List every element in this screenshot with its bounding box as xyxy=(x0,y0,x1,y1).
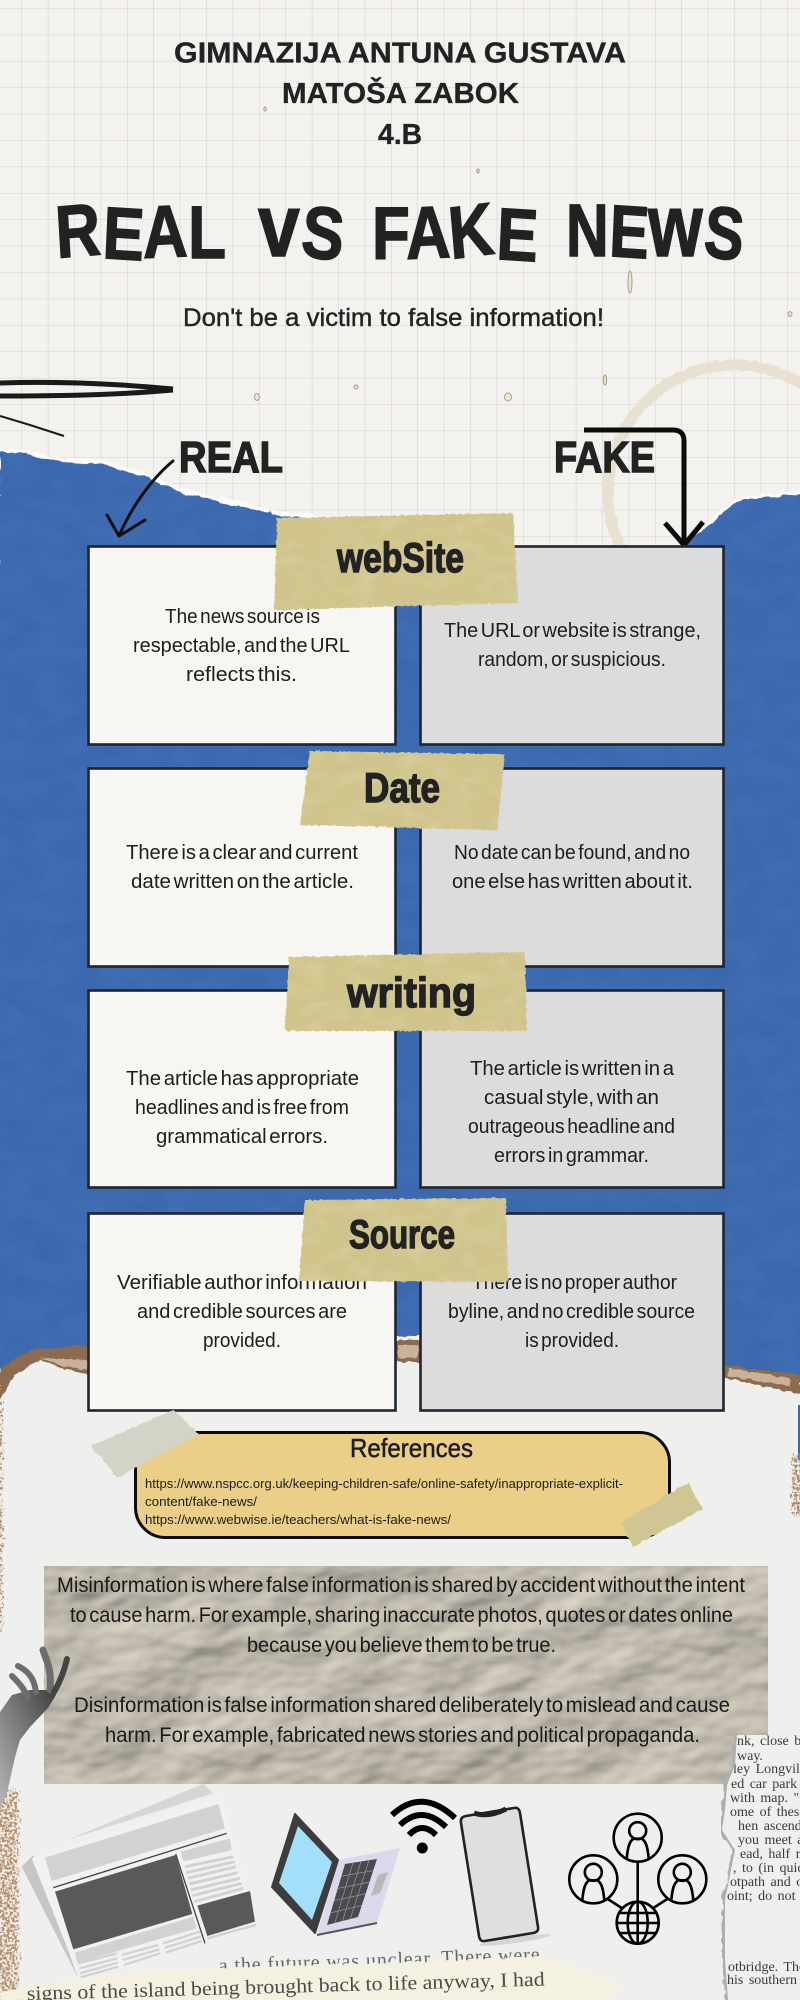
text: date fake: one else has written about it. xyxy=(452,870,693,893)
school name heading xyxy=(174,38,626,151)
text: writing fake xyxy=(468,1057,675,1167)
title: real vs fake news xyxy=(52,176,749,277)
text: writing fake: casual style, with an xyxy=(484,1086,659,1109)
reference links: https://www.nspcc.org.uk/keeping-children-safe/online-safety/inappropriate-explicit- xyxy=(145,1477,623,1491)
disinformation text: harm. For example, fabricated news stories and political propaganda. xyxy=(105,1724,700,1747)
panel: real vs fake cards xyxy=(88,546,724,1410)
arrow: real xyxy=(107,461,173,536)
text: source fake: There is no proper author xyxy=(472,1271,677,1294)
misinformation text: to cause harm. For example, sharing inaccurate photos, quotes or dates online xyxy=(70,1604,733,1627)
text: date real: There is a clear and current xyxy=(126,841,358,864)
text: source real: and credible sources are xyxy=(137,1300,347,1323)
hand reaching up xyxy=(0,1650,67,1810)
text: writing fake: The article is written in a xyxy=(470,1057,675,1080)
reference links xyxy=(145,1477,623,1527)
tape: source xyxy=(299,1198,508,1282)
text: source real: provided. xyxy=(203,1329,281,1352)
torn newspaper clipping right xyxy=(722,1734,800,2000)
icon: smartphone xyxy=(461,1808,551,1948)
tape: writing xyxy=(285,952,527,1031)
text: website real xyxy=(133,605,350,686)
text: source real: Verifiable author information xyxy=(117,1271,367,1294)
text: writing fake: errors in grammar. xyxy=(494,1144,649,1167)
newspaper clipping bottom xyxy=(0,1944,623,2000)
text: writing real xyxy=(126,1067,359,1148)
coffee ring stain xyxy=(608,365,800,619)
reference links: https://www.webwise.ie/teachers/what-is-fake-news/ xyxy=(145,1513,452,1527)
white fringe of the torn blue paper xyxy=(0,448,800,560)
label: fake: FAKE xyxy=(554,433,655,482)
text: writing real: grammatical errors. xyxy=(156,1125,328,1148)
misinformation text: because you believe them to be true. xyxy=(247,1634,556,1657)
icon: wifi xyxy=(392,1802,455,1854)
misinformation text: Misinformation is where false information is shared by accident without the intent xyxy=(57,1574,745,1597)
title: real vs fake news: NEwS xyxy=(566,176,749,276)
school name heading: 4.B xyxy=(378,119,422,151)
text: source fake: is provided. xyxy=(525,1329,619,1352)
school name heading: MATOŠA ZABOK xyxy=(282,76,519,110)
text: website real: The news source is xyxy=(165,605,320,628)
blue torn paper background xyxy=(0,452,800,1377)
panel: references xyxy=(136,1432,670,1538)
text: website fake xyxy=(444,619,701,671)
disinformation text xyxy=(74,1694,730,1747)
title: real vs fake news: vS xyxy=(258,176,349,276)
text: date fake xyxy=(452,841,693,893)
text: date real xyxy=(126,841,358,893)
tape: writing: writing xyxy=(346,969,476,1016)
tape: yellow on references xyxy=(621,1483,703,1547)
text: source fake xyxy=(448,1271,695,1352)
text: source fake: byline, and no credible source xyxy=(448,1300,695,1323)
tape: date: Date xyxy=(364,764,440,811)
reference links: content/fake-news/ xyxy=(145,1495,258,1509)
text: writing real: The article has appropriate xyxy=(126,1067,359,1090)
panel: crumpled paper definitions xyxy=(44,1566,768,1784)
text: website real: respectable, and the URL xyxy=(133,634,350,657)
icon: people network with globe xyxy=(569,1814,706,1944)
tape: website: webSite xyxy=(336,534,464,581)
torn newspaper clipping right: way. xyxy=(737,1749,763,1764)
tape: grey on references xyxy=(91,1410,199,1478)
icon: laptop xyxy=(272,1814,400,1935)
title: real vs fake news: FAKE xyxy=(372,188,540,277)
text: writing fake: outrageous headline and xyxy=(468,1115,675,1138)
tape: source: Source xyxy=(349,1213,455,1257)
brown torn band xyxy=(0,1340,800,1400)
arrow: fake xyxy=(584,430,703,545)
title: real vs fake news: REAL xyxy=(52,188,226,276)
text: source real xyxy=(117,1271,367,1352)
misinformation text xyxy=(57,1574,745,1657)
text: website fake: random, or suspicious. xyxy=(478,648,666,671)
tape: date xyxy=(300,751,505,830)
scribble lines xyxy=(0,382,173,436)
icon: newspaper xyxy=(22,1784,257,1980)
newspaper clipping bottom: a the future was unclear. There were xyxy=(218,1944,540,1977)
text: date fake: No date can be found, and no xyxy=(454,841,690,864)
references heading: References xyxy=(350,1433,473,1463)
school name heading: GIMNAZIJA ANTUNA GUSTAVA xyxy=(174,38,626,70)
tagline: Don't be a victim to false information! xyxy=(183,304,604,332)
text: date real: date written on the article. xyxy=(131,870,354,893)
bottom torn paper xyxy=(0,1340,800,2000)
disinformation text: Disinformation is false information shared deliberately to mislead and cause xyxy=(74,1694,730,1717)
text: writing real: headlines and is free from xyxy=(135,1096,349,1119)
label: real: REAL xyxy=(179,433,283,482)
right edge strip xyxy=(792,1405,800,1515)
text: website real: reflects this. xyxy=(186,663,297,686)
left brown speckled edge xyxy=(0,1400,18,2000)
text: website fake: The URL or website is strange, xyxy=(444,619,701,642)
tape: website xyxy=(274,513,518,610)
paper specks xyxy=(254,107,792,401)
